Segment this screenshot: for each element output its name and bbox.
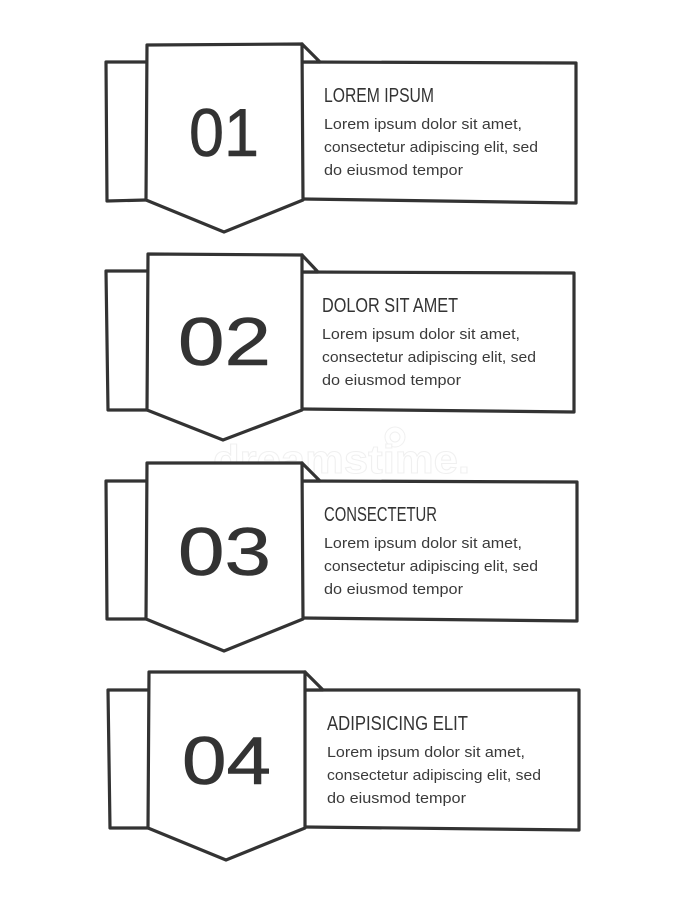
body text: consectetur adipiscing elit, sed (322, 349, 536, 366)
left tab (106, 481, 146, 619)
corner fold (302, 255, 318, 272)
body text: do eiusmod tempor (327, 790, 466, 807)
body text: do eiusmod tempor (324, 581, 463, 598)
number 03: 03 (178, 514, 271, 590)
shield (147, 254, 302, 440)
heading: ADIPISICING ELIT (327, 713, 468, 735)
body text: Lorem ipsum dolor sit amet, (324, 535, 522, 552)
heading: DOLOR SIT AMET (322, 295, 458, 317)
left tab (106, 62, 147, 201)
panel: step 04 (108, 672, 579, 860)
body text: do eiusmod tempor (324, 162, 463, 179)
heading: LOREM IPSUM (324, 85, 434, 107)
text box (303, 481, 577, 621)
body text: Lorem ipsum dolor sit amet, (324, 116, 522, 133)
body text: consectetur adipiscing elit, sed (324, 558, 538, 575)
corner fold (305, 672, 323, 690)
body text: do eiusmod tempor (322, 372, 461, 389)
left tab (106, 271, 147, 410)
corner fold (302, 463, 320, 481)
number 02: 02 (178, 304, 271, 380)
panel: step 02 (106, 254, 574, 440)
heading: CONSECTETUR (324, 504, 437, 526)
panel: step 01 (106, 44, 576, 232)
panel: step 03 (106, 463, 577, 651)
text box (303, 62, 576, 203)
number 04: 04 (182, 723, 271, 799)
body text: consectetur adipiscing elit, sed (324, 139, 538, 156)
text box (305, 690, 579, 830)
text box (302, 272, 574, 412)
shield (146, 463, 303, 651)
body text: consectetur adipiscing elit, sed (327, 767, 541, 784)
number 01: 01 (189, 95, 259, 171)
shield (148, 672, 305, 860)
corner fold (302, 44, 320, 62)
body text: Lorem ipsum dolor sit amet, (327, 744, 525, 761)
watermark: dreamstime. (213, 438, 470, 482)
left tab (108, 690, 149, 828)
body text: Lorem ipsum dolor sit amet, (322, 326, 520, 343)
shield (146, 44, 303, 232)
